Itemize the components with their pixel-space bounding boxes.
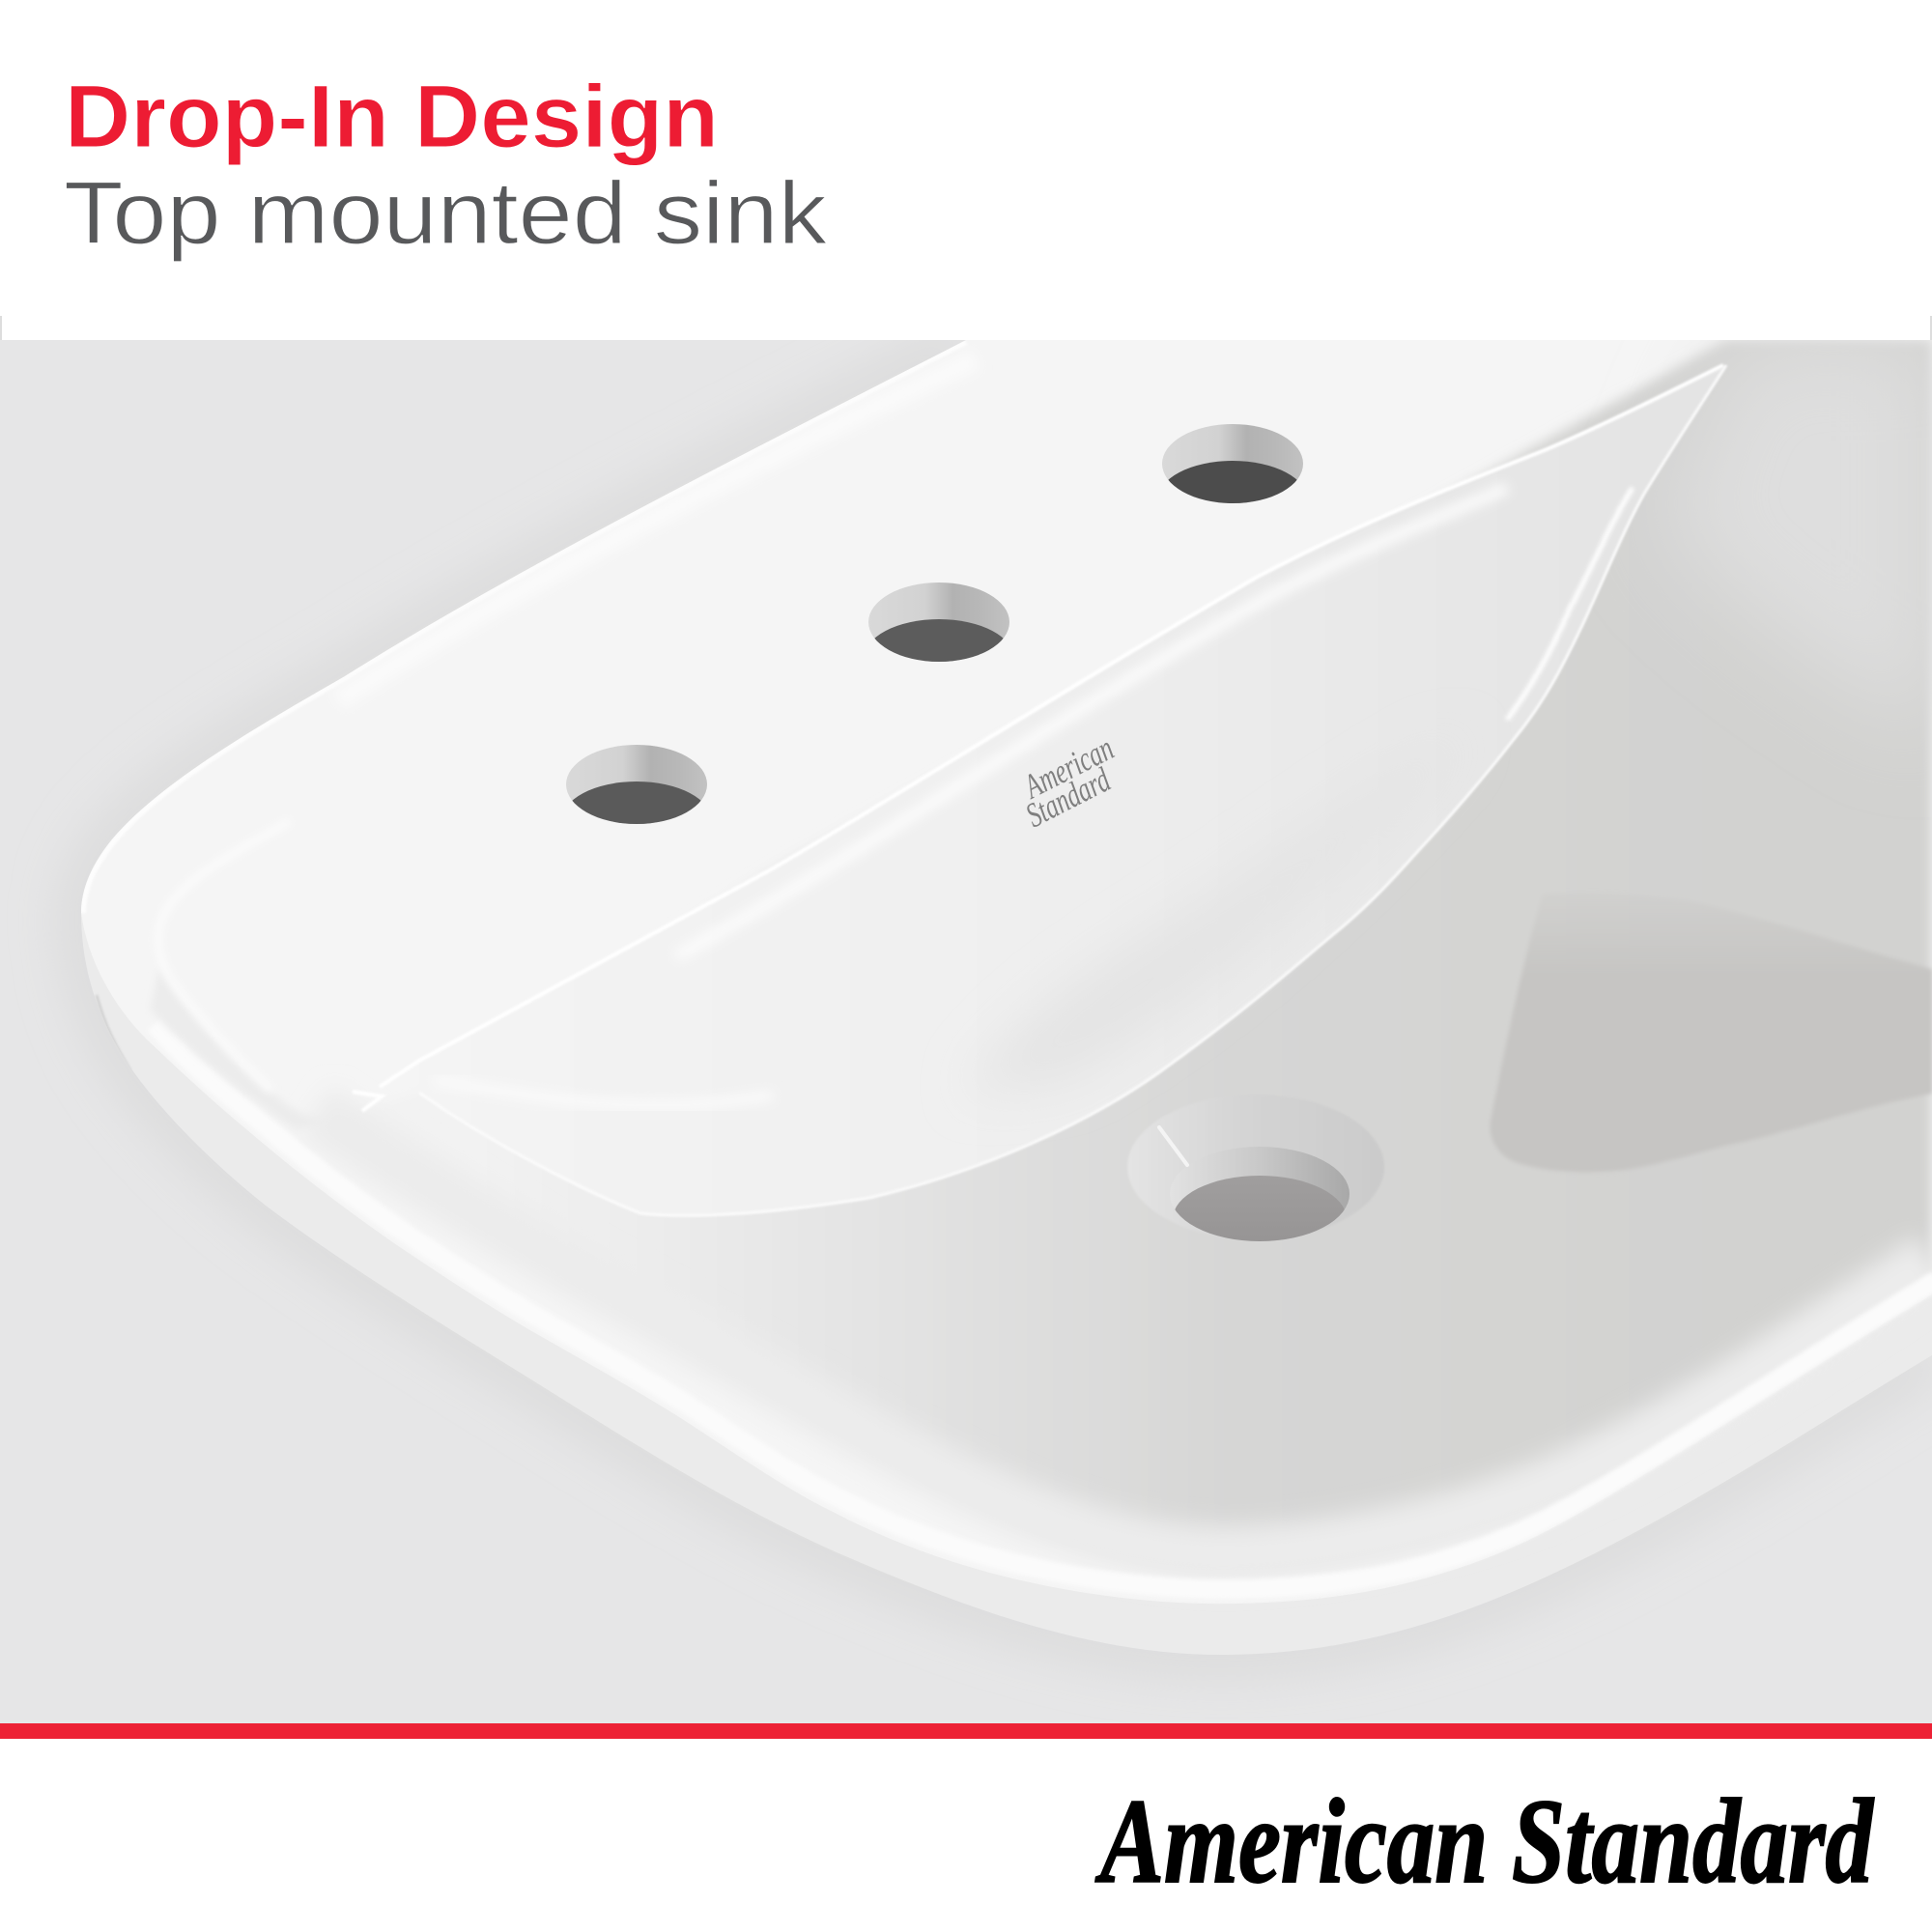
deck groove highlight: [158, 821, 290, 1091]
drain: [1127, 1094, 1384, 1263]
sink body: [81, 340, 1932, 1655]
countertop surface: [0, 340, 1932, 1723]
rim top left edge highlight: [83, 342, 966, 913]
far rim sheen: [338, 359, 976, 700]
deck front highlight line: [380, 365, 1723, 1087]
title: Drop-In Design: Drop-In Design: [65, 68, 719, 166]
basin inner edge glow: [867, 1238, 1930, 1569]
basin interior: [637, 340, 1932, 1534]
overflow corner glint: [353, 1092, 382, 1111]
subtitle: Top mounted sink: Top mounted sink: [64, 164, 828, 263]
embossed brand mark on sink: Standard: [1019, 759, 1117, 835]
basin top right light area: [1696, 352, 1920, 675]
red divider bar: [0, 1723, 1932, 1739]
drain inner wall: [1170, 1147, 1350, 1241]
ledge wall under deck: [709, 369, 1721, 1211]
side wall dark sliver: [97, 995, 130, 1070]
drain opening: [1173, 1176, 1347, 1263]
rim corner band: [150, 966, 328, 1130]
deck line glow: [676, 488, 1507, 956]
hole opening: [1157, 461, 1308, 540]
hole opening: [561, 781, 712, 861]
hole wall: [868, 582, 1009, 662]
faucet hole left: [561, 745, 712, 861]
faucet hole right: [1157, 424, 1308, 540]
panel: sink product photo: [0, 340, 1932, 1723]
hole opening: [864, 619, 1014, 698]
ledge sheen arc: [434, 1080, 773, 1105]
sink top surface: [81, 340, 1706, 1604]
embossed brand mark on sink: American: [1016, 728, 1120, 807]
embossed brand mark on sink: [1016, 728, 1120, 835]
basin interior shadow: [1491, 928, 1932, 1172]
ledge right edge second highlight: [1507, 488, 1633, 720]
ledge soft shading: [1044, 978, 1153, 1053]
hole wall: [1162, 424, 1303, 503]
drain outer cone: [1127, 1094, 1384, 1239]
sink shadow on countertop: [81, 340, 1932, 1655]
ledge lower edge line: [419, 365, 1726, 1215]
faucet hole centre: [864, 582, 1014, 698]
drain highlight: [1159, 1127, 1187, 1165]
hole wall: [566, 745, 707, 824]
bright rim highlight band: [1092, 1273, 1932, 1592]
sink side wall: [81, 915, 1932, 1655]
